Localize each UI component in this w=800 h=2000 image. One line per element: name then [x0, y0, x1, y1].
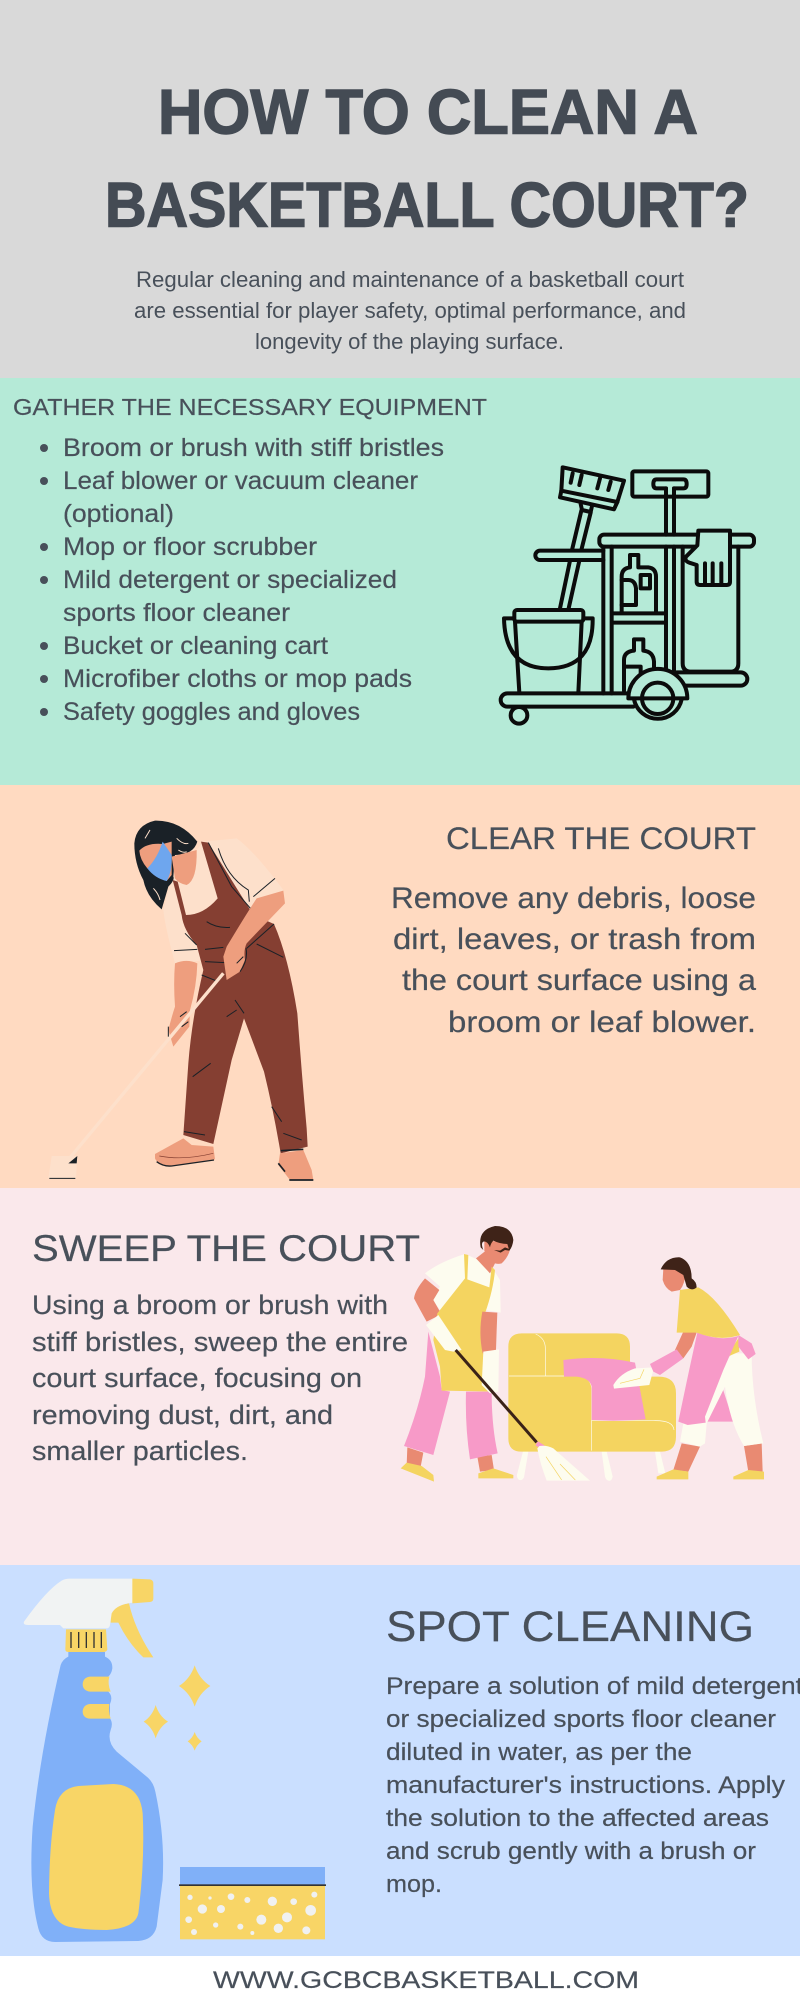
intro text: longevity of the playing surface. — [255, 329, 564, 354]
equipment list: Bucket or cleaning cart — [63, 632, 328, 660]
spot cleaning text: the solution to the affected areas — [386, 1805, 769, 1832]
sweep the court text: Using a broom or brush with — [32, 1290, 388, 1320]
equipment background — [0, 378, 800, 785]
title — [105, 78, 749, 240]
header background — [0, 0, 800, 378]
illustration: spray bottle — [24, 1579, 163, 1942]
equipment heading: GATHER THE NECESSARY EQUIPMENT — [13, 394, 487, 420]
clear the court text: Remove any debris, loose — [391, 882, 756, 915]
intro text: are essential for player safety, optimal performance, and — [134, 298, 686, 323]
clear the court text — [391, 882, 757, 1039]
sweep the court text: stiff bristles, sweep the entire — [32, 1327, 408, 1357]
panel: spot cleaning — [0, 1565, 800, 1956]
spot cleaning text: or specialized sports floor cleaner — [386, 1706, 776, 1733]
equipment list: Mop or floor scrubber — [63, 533, 317, 561]
spot cleaning background — [0, 1565, 800, 1956]
illustration: sponge — [179, 1867, 326, 1939]
equipment list: sports floor cleaner — [63, 599, 290, 627]
icon: cleaning cart — [501, 467, 754, 724]
clear the court background — [0, 785, 800, 1188]
equipment list: Broom or brush with stiff bristles — [63, 434, 444, 462]
equipment list: (optional) — [63, 500, 174, 528]
title: HOW TO CLEAN A — [158, 78, 698, 148]
spot cleaning text — [386, 1673, 800, 1898]
sweep the court text: smaller particles. — [32, 1436, 248, 1466]
spot cleaning text: and scrub gently with a brush or — [386, 1838, 756, 1865]
sweep the court text — [32, 1290, 408, 1466]
equipment list: Microfiber cloths or mop pads — [63, 665, 412, 693]
panel: gather the necessary equipment — [0, 378, 800, 785]
spot cleaning text: mop. — [386, 1871, 442, 1898]
panel: header — [0, 0, 800, 378]
spot cleaning text: manufacturer's instructions. Apply — [386, 1772, 786, 1799]
clear the court text: dirt, leaves, or trash from — [393, 923, 756, 956]
sweep the court heading: SWEEP THE COURT — [32, 1228, 420, 1269]
clear the court heading: CLEAR THE COURT — [446, 820, 756, 856]
illustration: couple cleaning an armchair — [401, 1226, 764, 1482]
title: BASKETBALL COURT? — [105, 170, 749, 240]
intro text — [134, 267, 686, 354]
spot cleaning text: diluted in water, as per the — [386, 1739, 692, 1766]
sweep the court text: removing dust, dirt, and — [32, 1400, 333, 1430]
spot cleaning heading: SPOT CLEANING — [386, 1603, 754, 1651]
spot cleaning text: Prepare a solution of mild detergent — [386, 1673, 800, 1700]
intro text: Regular cleaning and maintenance of a basketball court — [136, 267, 684, 292]
clear the court text: the court surface using a — [402, 964, 757, 997]
equipment list — [40, 434, 444, 726]
equipment list: Safety goggles and gloves — [63, 698, 360, 726]
sweep the court text: court surface, focusing on — [32, 1363, 362, 1393]
clear the court text: broom or leaf blower. — [448, 1006, 756, 1039]
illustration: woman with mask mopping — [48, 821, 313, 1180]
equipment list: Mild detergent or specialized — [63, 566, 397, 594]
panel: clear the court — [0, 785, 800, 1188]
icon: sparkles — [144, 1665, 210, 1751]
equipment list: Leaf blower or vacuum cleaner — [63, 467, 418, 495]
footer website: WWW.GCBCBASKETBALL.COM — [213, 1967, 639, 1994]
sweep the court background — [0, 1188, 800, 1565]
panel: sweep the court — [0, 1188, 800, 1565]
